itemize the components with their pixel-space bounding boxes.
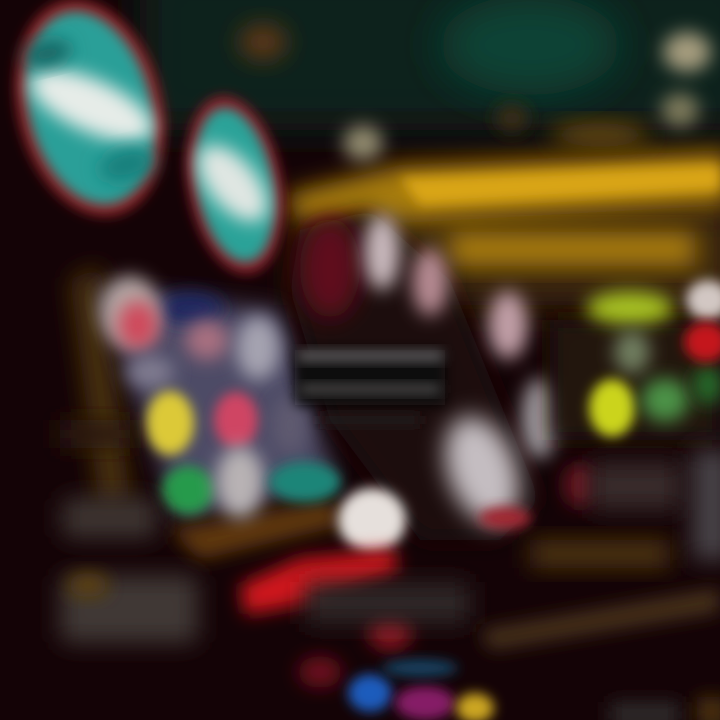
panels: left side grey labels xyxy=(60,420,198,643)
slot machine: right cabinet xyxy=(530,280,720,568)
sign: small oval xyxy=(173,88,297,282)
buttons: multicoloured xyxy=(348,659,494,720)
panel: console xyxy=(305,582,470,624)
slot machine: central cabinet xyxy=(290,210,596,540)
slot machine: left cabinet xyxy=(70,265,345,560)
background: casino wall and lights xyxy=(140,0,720,305)
button: white round xyxy=(338,488,406,552)
ledge: lower right xyxy=(480,588,720,720)
reel symbols xyxy=(100,276,341,518)
sign: large oval xyxy=(0,0,186,232)
panel: dark central text block xyxy=(295,350,445,425)
button: red panel xyxy=(240,550,412,688)
